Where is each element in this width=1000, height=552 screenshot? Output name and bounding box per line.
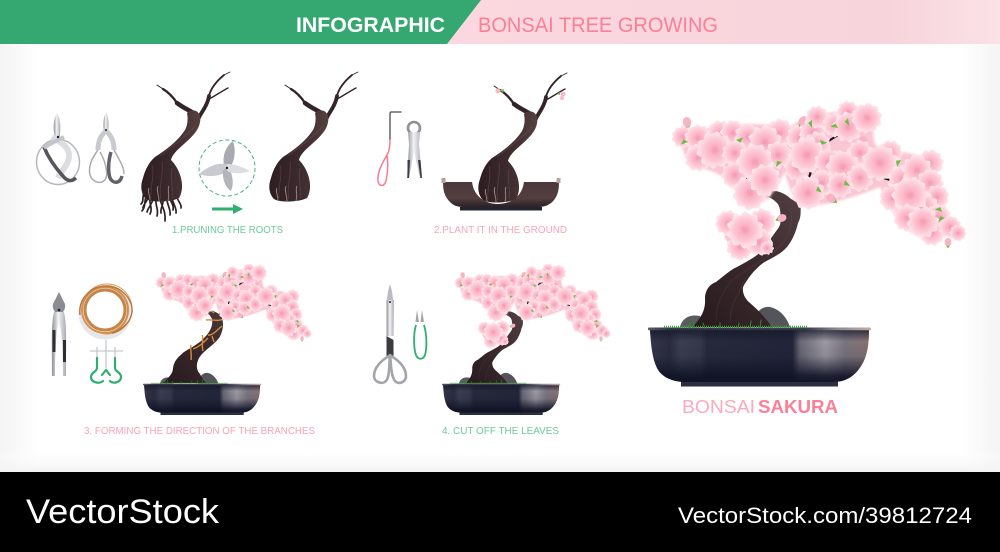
footer image url: VectorStock.com/39812724 <box>678 503 972 528</box>
caption: step 1: 1.PRUNING THE ROOTS <box>172 224 283 236</box>
icon: bonsai pliers <box>52 292 66 376</box>
icon: long leaf scissors <box>374 284 406 383</box>
caption: bonsai sakura: SAKURA <box>758 396 838 417</box>
footer bar <box>0 472 1000 552</box>
panel: step 4 cut off the leaves <box>374 261 613 437</box>
bonsai tree with long roots <box>141 72 230 221</box>
icon: round-handled scissors <box>36 113 80 184</box>
caption: step 3: 3. FORMING THE DIRECTION OF THE BRANCHES <box>84 425 315 437</box>
bonsai tree planted in pot <box>478 73 567 203</box>
panel: step 1 pruning the roots <box>36 72 358 236</box>
bonsai tree with wired trunk <box>143 261 314 415</box>
bonsai tree with trimmed crown <box>442 261 613 415</box>
empty pot with soil <box>442 178 560 210</box>
footer logo wordmark: VectorStock <box>26 493 220 531</box>
heading: infographic: INFOGRAPHIC <box>296 14 445 37</box>
arrow: pruning direction <box>212 204 243 214</box>
icon: hooked wire tool <box>378 112 401 186</box>
panel: step 3 forming the direction of the branches <box>52 261 315 437</box>
page background <box>0 44 1000 472</box>
caption: step 2: 2.PLANT IT IN THE GROUND <box>434 224 567 236</box>
panel: step 2 plant it in the ground <box>378 73 567 236</box>
panel: finished bonsai sakura <box>648 95 970 417</box>
icon: copper wire coil <box>80 284 132 337</box>
caption: step 4: 4. CUT OFF THE LEAVES <box>442 425 559 437</box>
heading: bonsai tree growing: BONSAI TREE GROWING <box>478 14 718 37</box>
caption: bonsai sakura: BONSAI <box>682 396 755 417</box>
icon: wire cutting tool <box>90 340 123 383</box>
icon: green-handled snips <box>414 310 426 359</box>
icon: pruning shears star in dashed circle <box>199 140 255 196</box>
header banner <box>0 0 1000 44</box>
icon: narrow-handled scissors <box>89 112 124 182</box>
bonsai tree with pruned roots <box>269 72 358 202</box>
icon: root pincers <box>407 122 422 178</box>
blossom buds on branch tips <box>496 88 566 100</box>
